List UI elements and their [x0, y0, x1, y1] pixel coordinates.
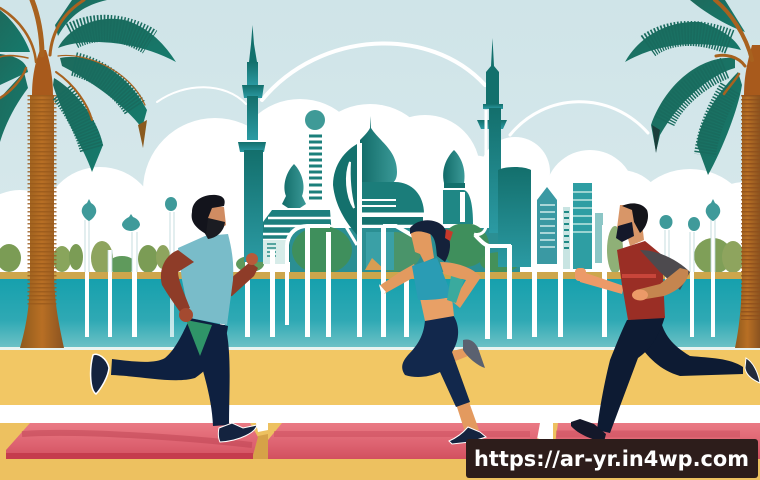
arm right [440, 262, 481, 308]
beard [616, 222, 634, 242]
fronds [625, 0, 745, 175]
big dome [333, 116, 425, 270]
back leg and shoe [636, 318, 743, 376]
sky [0, 0, 760, 280]
head [617, 205, 644, 246]
sleeve [640, 250, 690, 290]
hair [622, 203, 648, 233]
right towers [537, 183, 603, 269]
back shin and shoe [448, 348, 468, 364]
hair [410, 220, 450, 262]
frond tips [652, 125, 660, 153]
skyline [238, 25, 603, 274]
striped base [263, 210, 334, 264]
lamp heads [82, 197, 720, 272]
right palm tree [625, 0, 760, 348]
shirt [178, 234, 233, 325]
clouds [0, 99, 760, 301]
frond feathering [62, 28, 150, 150]
water [0, 279, 760, 348]
left minaret [238, 25, 266, 262]
frond feathering [648, 33, 730, 155]
right minaret [477, 38, 531, 267]
head [204, 205, 226, 235]
midriff [420, 298, 454, 321]
front leg [200, 325, 230, 426]
neck and face [410, 230, 434, 262]
front leg and shoe [597, 316, 665, 433]
left palm tree [0, 0, 176, 348]
leggings [402, 315, 470, 407]
url badge [466, 439, 758, 478]
shorts panel [186, 320, 212, 356]
near arm [636, 268, 688, 300]
hair tie [445, 229, 453, 241]
far arm [222, 262, 258, 298]
running mats [6, 423, 760, 459]
near arm [161, 250, 194, 312]
arm left [379, 264, 418, 294]
right small dome [443, 150, 473, 224]
top [412, 258, 452, 300]
shoe [449, 427, 486, 444]
runner 2: woman in teal top [379, 220, 486, 444]
url badge: https://ar-yr.in4wp.com [474, 447, 749, 471]
promenade [0, 347, 760, 480]
runner 3: man in red shirt [571, 203, 760, 442]
low greenery [290, 223, 520, 274]
fronds [0, 0, 176, 172]
far arm [577, 270, 624, 294]
beard [203, 218, 225, 239]
runner 1: man in blue shirt [91, 195, 258, 442]
frond stems [0, 0, 145, 120]
frond stems [715, 0, 752, 94]
striped tower [305, 110, 325, 208]
wrist pack [447, 276, 464, 303]
front calf [456, 402, 479, 432]
back leg [111, 318, 228, 380]
far shore [0, 272, 760, 280]
shirt [617, 241, 665, 320]
shoes [91, 354, 109, 394]
frond tips [138, 120, 147, 148]
small left dome [282, 164, 306, 208]
shoreline trees [0, 226, 744, 275]
hair [192, 195, 225, 234]
white posts [85, 143, 715, 339]
arcs [157, 43, 648, 135]
